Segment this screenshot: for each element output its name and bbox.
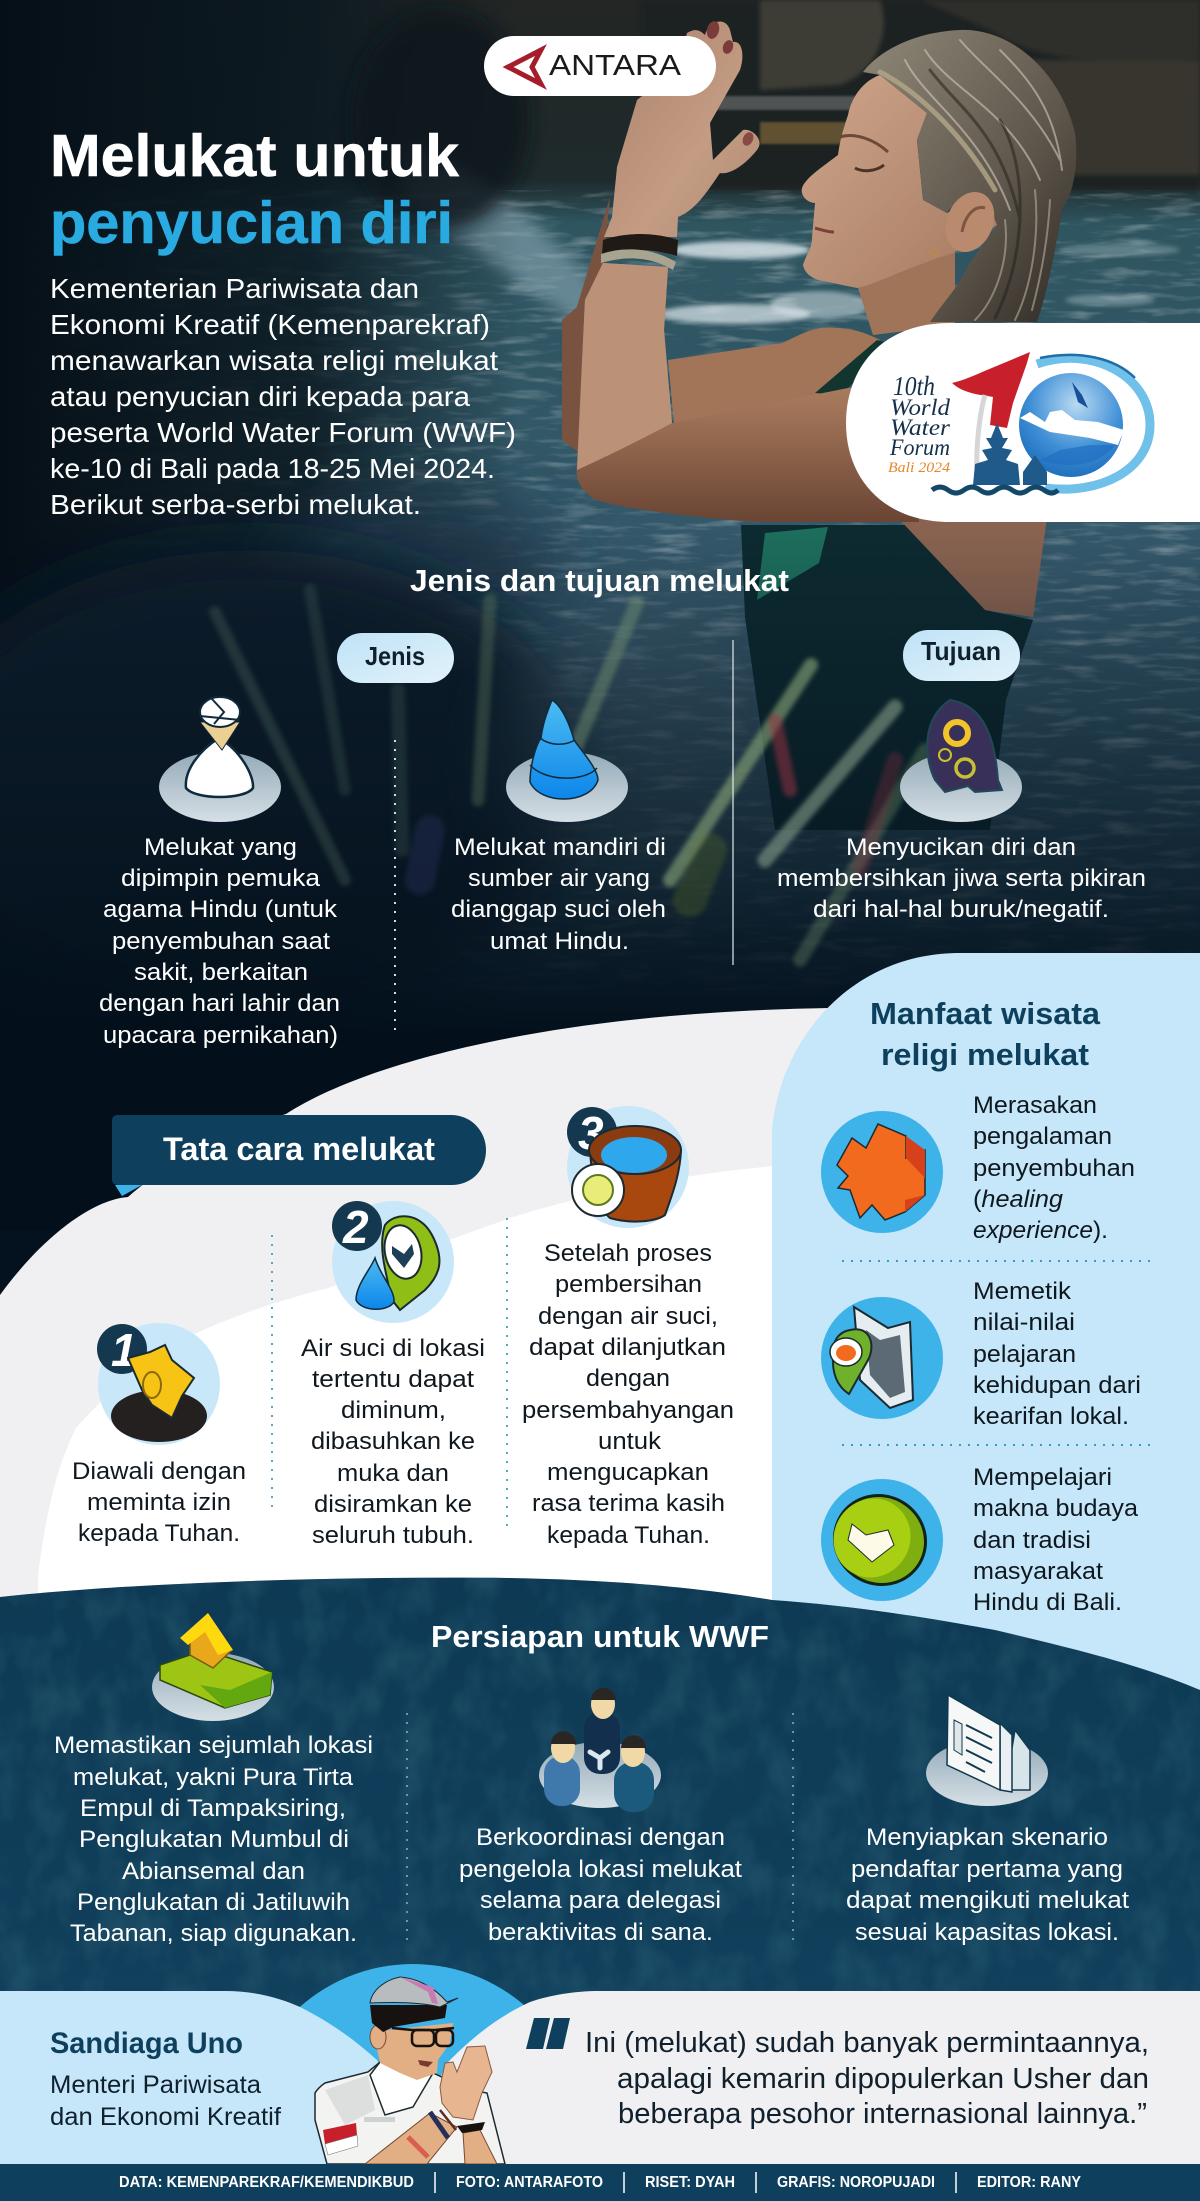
text: jenis 1: sakit, berkaitan bbox=[134, 959, 308, 986]
pill: Jenis: Jenis bbox=[365, 641, 425, 671]
text: persiapan 1: Empul di Tampaksiring, bbox=[80, 1795, 346, 1822]
heading: manfaat bbox=[870, 996, 1101, 1072]
text: jenis 2: Melukat mandiri di bbox=[454, 834, 666, 861]
badge: Antara logo: ANTARA bbox=[549, 50, 682, 82]
speaker name and role: Sandiaga Uno bbox=[50, 2027, 243, 2060]
text: step 1: kepada Tuhan. bbox=[78, 1520, 240, 1547]
speaker name and role bbox=[50, 2027, 281, 2131]
title bbox=[50, 123, 459, 256]
icon: water drop bbox=[506, 700, 628, 822]
text: jenis 1: dengan hari lahir dan bbox=[99, 990, 340, 1017]
text: manfaat 3: Hindu di Bali. bbox=[973, 1589, 1122, 1616]
intro paragraph: Berikut serba-serbi melukat. bbox=[50, 489, 421, 520]
text: jenis 1 bbox=[99, 834, 340, 1049]
text: persiapan 1 bbox=[54, 1732, 373, 1947]
icon: priest bbox=[159, 697, 281, 822]
text: jenis 1: Melukat yang bbox=[144, 834, 297, 861]
text: step 1: Diawali dengan bbox=[72, 1458, 246, 1485]
text: step 3: dengan bbox=[586, 1365, 670, 1392]
curved light panel bbox=[0, 1008, 830, 1640]
quote text: beberapa pesohor internasional lainnya.” bbox=[618, 2098, 1147, 2130]
pill: Tujuan bbox=[903, 630, 1020, 681]
text: step 2: seluruh tubuh. bbox=[312, 1522, 474, 1549]
heading pill: tata cara: Tata cara melukat bbox=[163, 1131, 435, 1167]
text: persiapan 1: Abiansemal dan bbox=[122, 1858, 305, 1885]
heading pill: tata cara bbox=[112, 1115, 486, 1196]
text: tujuan: dari hal-hal buruk/negatif. bbox=[813, 896, 1109, 923]
text: jenis 1: agama Hindu (untuk bbox=[103, 896, 338, 923]
text: persiapan 3 bbox=[846, 1824, 1129, 1946]
icon: documents bbox=[926, 1695, 1048, 1806]
text: manfaat 3: masyarakat bbox=[973, 1558, 1103, 1585]
text: manfaat 2: nilai-nilai bbox=[973, 1309, 1075, 1336]
text: persiapan 2: Berkoordinasi dengan bbox=[476, 1824, 725, 1851]
panel: World Water Forum logo bbox=[846, 323, 1200, 522]
dividers: tata cara columns bbox=[272, 1218, 507, 1530]
icon: house on terraces bbox=[152, 1613, 274, 1721]
badge: Antara logo bbox=[484, 36, 716, 96]
icon: map and pin bbox=[821, 1297, 943, 1419]
text: jenis 1: upacara pernikahan) bbox=[103, 1022, 338, 1049]
text: persiapan 1: Penglukatan Mumbul di bbox=[79, 1826, 349, 1853]
text: step 1 bbox=[72, 1458, 246, 1547]
dividers: persiapan columns bbox=[407, 1713, 793, 1943]
text: tujuan bbox=[777, 834, 1146, 923]
divider: tujuan bbox=[732, 640, 734, 965]
panel: manfaat background bbox=[772, 953, 1200, 1720]
text: jenis 1: penyembuhan saat bbox=[112, 928, 330, 955]
text: manfaat 3 bbox=[973, 1464, 1138, 1616]
intro paragraph: atau penyucian diri kepada para bbox=[50, 381, 470, 412]
text: step 3: kepada Tuhan. bbox=[547, 1522, 710, 1549]
footer credits: EDITOR: RANY bbox=[977, 2174, 1082, 2191]
text: persiapan 3: pendaftar pertama yang bbox=[851, 1856, 1123, 1883]
heading: jenis dan tujuan: Jenis dan tujuan melukat bbox=[410, 563, 789, 598]
text: persiapan 1: melukat, yakni Pura Tirta bbox=[73, 1764, 353, 1791]
text: manfaat 1: pengalaman bbox=[973, 1123, 1112, 1150]
text: step 1: meminta izin bbox=[87, 1489, 231, 1516]
text: step 3: pembersihan bbox=[555, 1271, 702, 1298]
icon: head with gears bbox=[900, 700, 1022, 822]
background photo: temple water bbox=[0, 0, 1200, 1120]
text: persiapan 3: Menyiapkan skenario bbox=[866, 1824, 1108, 1851]
darkening fade over photo bbox=[0, 530, 1200, 1040]
lower dark base bbox=[0, 1030, 1200, 1230]
text: step 3: persembahyangan bbox=[522, 1397, 734, 1424]
text: jenis 2: umat Hindu. bbox=[490, 928, 629, 955]
text: manfaat 1: (healing bbox=[973, 1186, 1063, 1213]
text: jenis 1: dipimpin pemuka bbox=[121, 865, 320, 892]
text: persiapan 1: Memastikan sejumlah lokasi bbox=[54, 1732, 373, 1759]
text: manfaat 3: Mempelajari bbox=[973, 1464, 1112, 1491]
text: manfaat 1: Merasakan bbox=[973, 1092, 1097, 1119]
text: jenis 2: dianggap suci oleh bbox=[451, 896, 666, 923]
icon: check badge bbox=[818, 1479, 943, 1601]
text: manfaat 2: kehidupan dari bbox=[973, 1372, 1141, 1399]
pill: Tujuan: Tujuan bbox=[921, 636, 1001, 666]
panel: quote bbox=[430, 1991, 1200, 2164]
text: jenis 2 bbox=[451, 834, 666, 955]
quote text: apalagi kemarin dipopulerkan Usher dan bbox=[617, 2063, 1149, 2095]
text: step 2: disiramkan ke bbox=[314, 1491, 472, 1518]
text: persiapan 3: dapat mengikuti melukat bbox=[846, 1887, 1129, 1914]
panel: World Water Forum logo: Forum bbox=[889, 435, 950, 460]
text: manfaat 1 bbox=[973, 1092, 1135, 1244]
text: step 2: diminum, bbox=[341, 1397, 446, 1424]
text: persiapan 2: pengelola lokasi melukat bbox=[459, 1856, 742, 1883]
intro paragraph: Kementerian Pariwisata dan bbox=[50, 273, 419, 304]
speaker name and role: dan Ekonomi Kreatif bbox=[50, 2103, 281, 2131]
intro paragraph: Ekonomi Kreatif (Kemenparekraf) bbox=[50, 309, 490, 340]
heading: manfaat: religi melukat bbox=[881, 1037, 1089, 1072]
footer credits: GRAFIS: NOROPUJADI bbox=[777, 2174, 935, 2191]
dividers: manfaat items bbox=[842, 1261, 1150, 1445]
icon: step 2 water and pin: 2 bbox=[342, 1201, 369, 1253]
footer credits bbox=[0, 2164, 1200, 2201]
text: manfaat 3: dan tradisi bbox=[973, 1527, 1091, 1554]
quote text bbox=[585, 2027, 1149, 2130]
icon: three people bbox=[539, 1688, 661, 1812]
photo: woman praying in water bbox=[562, 20, 1076, 830]
footer credits: FOTO: ANTARAFOTO bbox=[456, 2174, 603, 2191]
text: step 3: untuk bbox=[598, 1428, 662, 1455]
accent arch behind portrait bbox=[242, 1964, 584, 2201]
icon: step 3 pot and flower bbox=[567, 1106, 689, 1228]
intro paragraph: ke-10 di Bali pada 18-25 Mei 2024. bbox=[50, 453, 495, 484]
title: penyucian diri bbox=[50, 190, 453, 256]
icon: healing cross bbox=[821, 1111, 943, 1233]
heading: persiapan: Persiapan untuk WWF bbox=[431, 1619, 769, 1654]
title: Melukat untuk bbox=[50, 123, 459, 189]
text: persiapan 3: sesuai kapasitas lokasi. bbox=[855, 1919, 1119, 1946]
icon: step 3 pot and flower: 3 bbox=[578, 1107, 604, 1159]
text: persiapan 2: selama para delegasi bbox=[480, 1887, 721, 1914]
text: persiapan 1: Tabanan, siap digunakan. bbox=[70, 1920, 357, 1947]
intro paragraph: peserta World Water Forum (WWF) bbox=[50, 417, 516, 448]
quote text: Ini (melukat) sudah banyak permintaannya, bbox=[585, 2027, 1149, 2059]
text: step 3: mengucapkan bbox=[547, 1459, 709, 1486]
text: step 3: Setelah proses bbox=[544, 1240, 712, 1267]
white inner panel bbox=[38, 1164, 800, 1640]
text: jenis 2: sumber air yang bbox=[468, 865, 650, 892]
panel: speaker bbox=[0, 1991, 400, 2164]
text: step 3: rasa terima kasih bbox=[532, 1490, 725, 1517]
text: step 3: dapat dilanjutkan bbox=[529, 1334, 726, 1361]
text: step 3 bbox=[522, 1240, 734, 1549]
text: manfaat 2: pelajaran bbox=[973, 1341, 1076, 1368]
text: step 2 bbox=[301, 1335, 485, 1549]
pill: Jenis bbox=[337, 633, 454, 683]
panel: World Water Forum logo: World bbox=[890, 395, 951, 420]
heading: manfaat: Manfaat wisata bbox=[870, 996, 1101, 1031]
text: step 2: dibasuhkan ke bbox=[311, 1428, 475, 1455]
text: tujuan: membersihkan jiwa serta pikiran bbox=[777, 865, 1146, 892]
divider: jenis columns bbox=[394, 740, 396, 1030]
portrait: Sandiaga Uno bbox=[315, 1977, 505, 2164]
panel: World Water Forum logo: 10th bbox=[893, 371, 935, 401]
icon: step 2 water and pin bbox=[332, 1201, 454, 1323]
text: step 2: tertentu dapat bbox=[312, 1366, 474, 1393]
section background: persiapan bbox=[0, 1570, 1200, 2010]
text: manfaat 2 bbox=[973, 1278, 1141, 1430]
text: step 2: Air suci di lokasi bbox=[301, 1335, 485, 1362]
text: persiapan 2: beraktivitas di sana. bbox=[488, 1919, 713, 1946]
speaker name and role: Menteri Pariwisata bbox=[50, 2071, 261, 2099]
text: tujuan: Menyucikan diri dan bbox=[846, 834, 1076, 861]
text: step 2: muka dan bbox=[337, 1460, 449, 1487]
text: persiapan 1: Penglukatan di Jatiluwih bbox=[77, 1889, 350, 1916]
intro paragraph bbox=[50, 273, 516, 520]
text: persiapan 2 bbox=[459, 1824, 742, 1946]
text: manfaat 2: Memetik bbox=[973, 1278, 1072, 1305]
footer credits: DATA: KEMENPAREKRAF/KEMENDIKBUD bbox=[119, 2174, 414, 2191]
text: step 3: dengan air suci, bbox=[538, 1303, 718, 1330]
footer credits: RISET: DYAH bbox=[645, 2174, 735, 2191]
text: manfaat 2: kearifan lokal. bbox=[973, 1403, 1129, 1430]
icon: step 1 offering: 1 bbox=[111, 1324, 137, 1376]
panel: World Water Forum logo: Bali 2024 bbox=[888, 460, 951, 476]
reeds and offerings in the foreground bbox=[215, 590, 925, 960]
quote mark bbox=[526, 2018, 570, 2049]
text: manfaat 1: experience). bbox=[973, 1217, 1108, 1244]
icon: step 1 offering bbox=[97, 1323, 220, 1445]
intro paragraph: menawarkan wisata religi melukat bbox=[50, 345, 498, 376]
panel: World Water Forum logo: Water bbox=[890, 415, 951, 440]
text: manfaat 1: penyembuhan bbox=[973, 1155, 1135, 1182]
text: manfaat 3: makna budaya bbox=[973, 1495, 1138, 1522]
